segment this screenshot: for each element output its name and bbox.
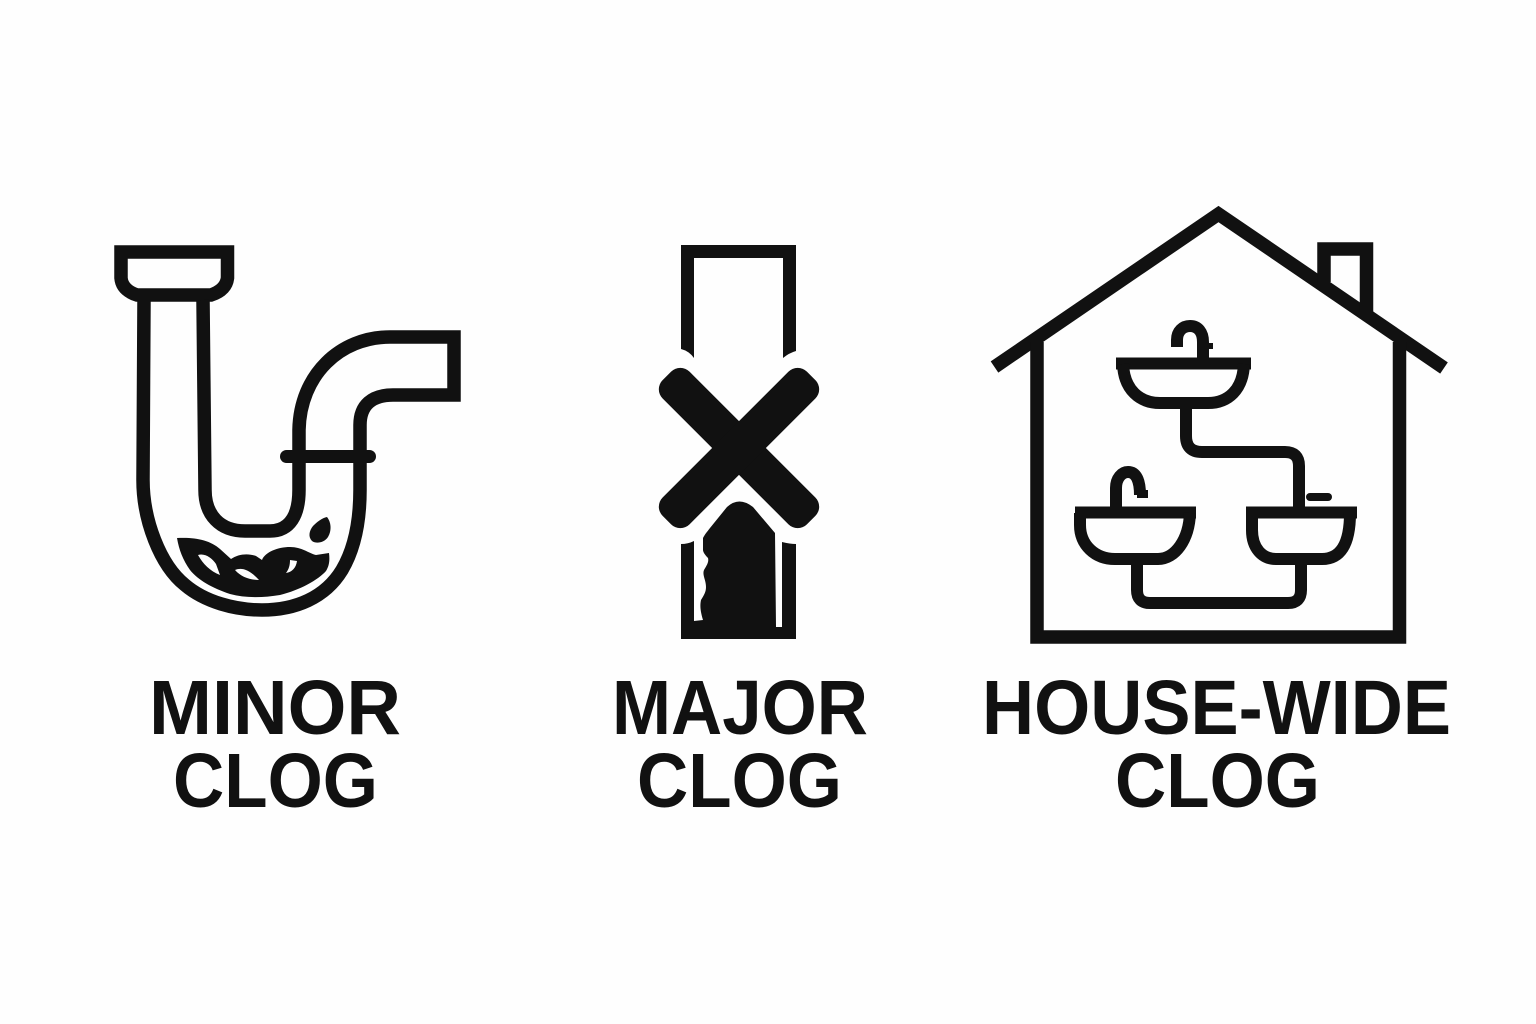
label: house-wide clog: CLOG bbox=[1115, 738, 1320, 824]
icon: house with connected sinks bbox=[994, 214, 1444, 637]
label: minor clog: CLOG bbox=[173, 738, 378, 824]
label: major clog bbox=[612, 665, 868, 824]
label: minor clog: MINOR bbox=[149, 665, 401, 751]
icon: blocked pipe with X bbox=[653, 245, 825, 639]
label: house-wide clog bbox=[982, 665, 1451, 824]
panel: house-wide clog bbox=[982, 214, 1451, 824]
label: major clog: CLOG bbox=[637, 738, 842, 824]
label: house-wide clog: HOUSE-WIDE bbox=[982, 665, 1451, 751]
panel: minor clog bbox=[121, 252, 454, 824]
label: major clog: MAJOR bbox=[612, 665, 868, 751]
panel: major clog bbox=[612, 245, 868, 824]
icon: sinks and pipes bbox=[1075, 326, 1357, 603]
label: minor clog bbox=[149, 665, 401, 824]
icon: house outline bbox=[994, 214, 1444, 637]
icon: P-trap pipe with debris bbox=[121, 252, 454, 610]
